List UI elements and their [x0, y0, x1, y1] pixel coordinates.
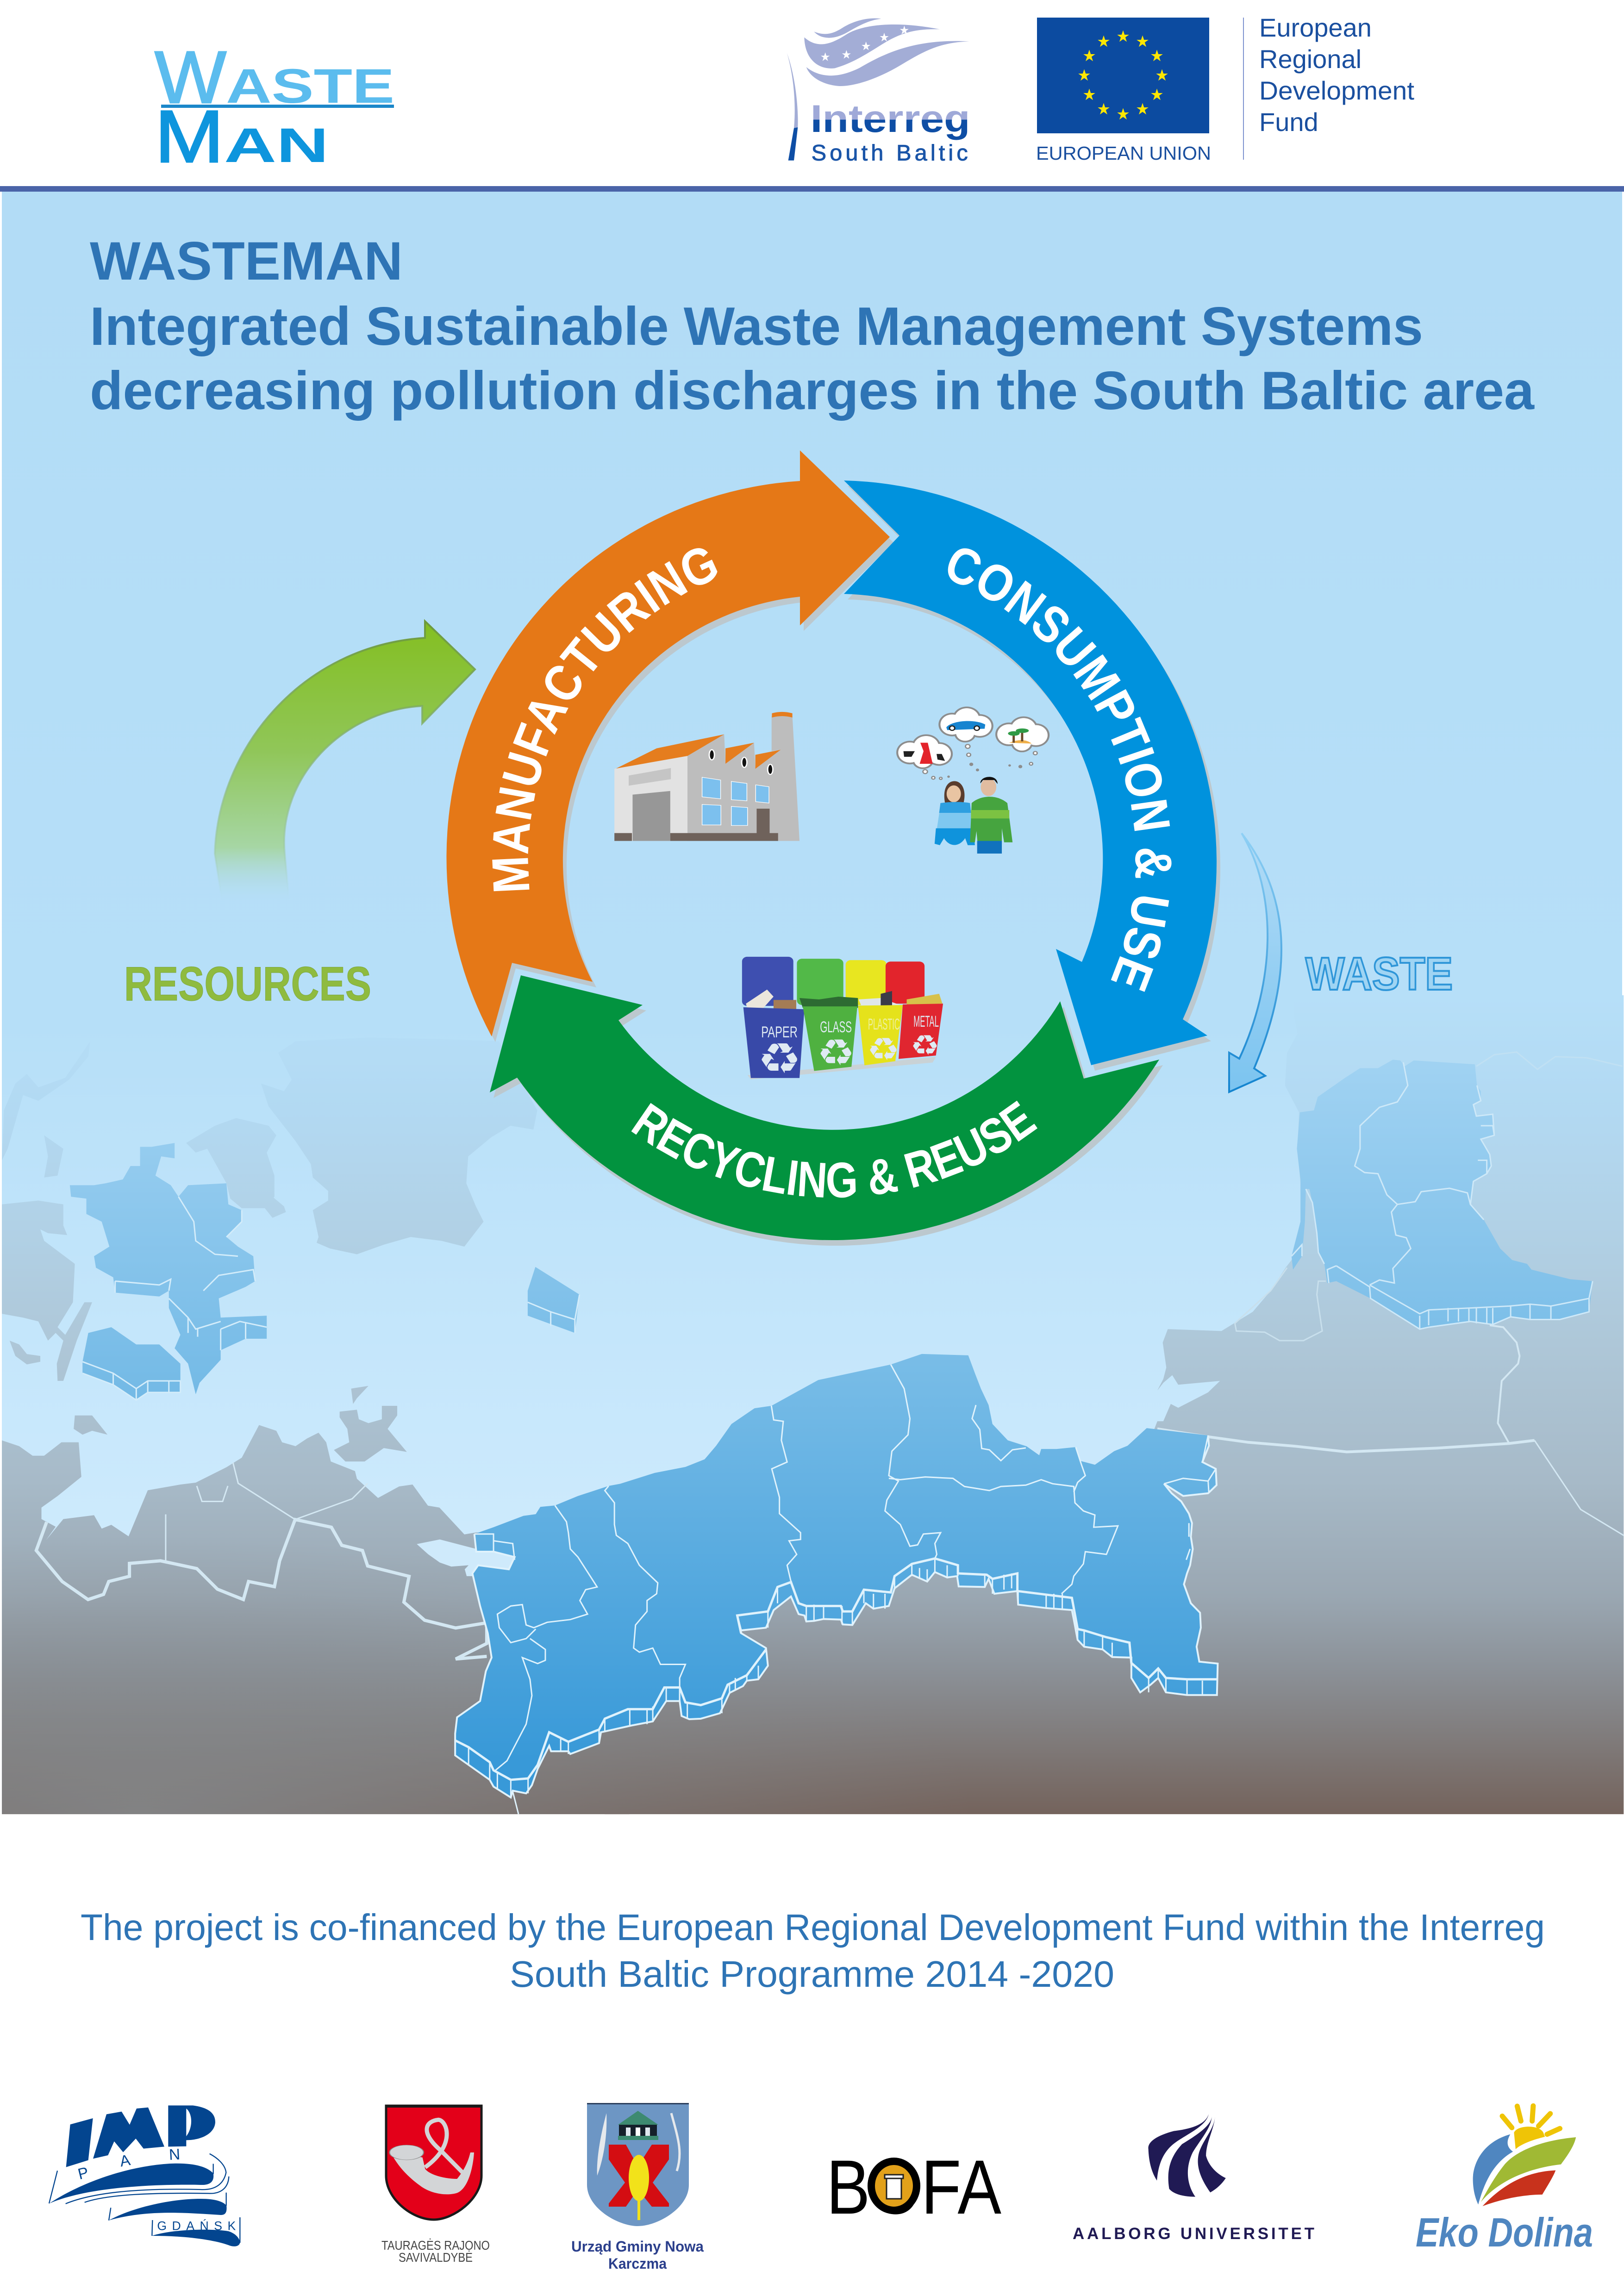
logo: Eko Dolina	[1416, 2106, 1593, 2255]
icon: recycling bins: PLASTIC	[868, 1015, 900, 1033]
icon: recycling bins: ♻	[910, 1029, 939, 1062]
arrow: resources	[215, 621, 475, 903]
logo: Aalborg Universitet	[1073, 2114, 1314, 2243]
text: Urzad Gminy Nowa Karczma: Urząd Gminy Nowa	[571, 2238, 704, 2255]
text: co-financing statement: The project is co-financed by the European Regional Development Fund within the Interreg	[81, 1907, 1545, 1948]
cycle: recycling and reuse arrow	[490, 975, 1163, 1246]
label: WASTE: WASTE	[1305, 948, 1453, 1000]
text: Urzad Gminy Nowa Karczma	[571, 2238, 704, 2272]
logo: EU flag: EUROPEAN UNION	[1036, 143, 1211, 164]
map: highlighted regions Poland	[455, 1354, 1218, 1797]
logo: WasteMan: ASTE	[226, 59, 394, 113]
logo: IMP PAN Gdansk: P	[76, 2164, 90, 2183]
logo: IMP PAN Gdansk: GDAŃSK	[157, 2219, 236, 2233]
map: line below Poland	[512, 1791, 518, 1814]
logo: Interreg South Baltic	[787, 19, 970, 166]
map: western land masses	[2, 1037, 630, 1814]
text: European Regional Development Fund	[1243, 13, 1414, 160]
logo: Interreg South Baltic: Interreg	[811, 97, 970, 140]
logo: EU flag	[1036, 18, 1211, 164]
logo: IMP PAN Gdansk	[49, 2105, 240, 2246]
title: decreasing pollution discharges in the South Baltic area	[90, 360, 1535, 421]
text: co-financing statement: South Baltic Programme 2014 -2020	[510, 1953, 1114, 1995]
logo: WasteMan: M	[155, 95, 224, 178]
icon: recycling bins	[742, 957, 943, 1083]
text: European Regional Development Fund: Fund	[1259, 107, 1318, 137]
logo: Taurage coat of arms	[385, 2105, 482, 2220]
text: Taurages rajono savivaldybe: TAURAGĖS RAJONO	[381, 2238, 490, 2252]
logo: BOFA: BOFA	[826, 2145, 1001, 2230]
map: eastern borders	[1157, 1052, 1624, 1535]
logo: Interreg South Baltic: South Baltic	[812, 141, 968, 166]
icon: recycling bins: ♻	[867, 1031, 899, 1068]
cycle: consumption and use arrow	[844, 480, 1220, 1071]
logo: Aalborg Universitet: AALBORG UNIVERSITET	[1073, 2225, 1314, 2243]
text: Taurages rajono savivaldybe	[381, 2238, 490, 2265]
map: white borders on land	[36, 1463, 487, 1659]
map: highlighted region Lithuania	[1292, 1060, 1593, 1329]
text: METAL	[913, 1012, 939, 1030]
text: co-financing statement	[81, 1907, 1545, 1995]
logo: IMP PAN Gdansk: N	[169, 2146, 181, 2164]
icon: recycling bins: ♻	[817, 1032, 855, 1074]
logo: Nowa Karczma coat of arms	[587, 2103, 689, 2226]
map: lagoon	[417, 1540, 515, 1598]
text: European Regional Development Fund: European	[1259, 13, 1372, 42]
icon: people dreaming of goods	[896, 706, 1049, 854]
logo: WasteMan: AN	[224, 119, 329, 173]
icon: recycling bins: ♻	[757, 1035, 801, 1083]
text: Taurages rajono savivaldybe: SAVIVALDYBĖ	[399, 2250, 473, 2265]
map: eastern land masses	[605, 995, 1624, 1814]
title: Integrated Sustainable Waste Management Systems	[90, 296, 1423, 356]
icon: recycling bins: PAPER	[761, 1023, 798, 1041]
text: Urzad Gminy Nowa Karczma: Karczma	[608, 2255, 667, 2272]
panel: map background	[2, 192, 1624, 1814]
logo: IMP PAN Gdansk: A	[119, 2152, 132, 2171]
cycle: manufacturing arrow	[446, 450, 893, 1042]
arrow: waste	[1229, 833, 1281, 1092]
map: island Bornholm	[528, 1267, 580, 1333]
logo: WasteMan: W	[155, 36, 226, 119]
text: European Regional Development Fund: Regional	[1259, 44, 1362, 74]
map: darker bottom-left tone	[2, 1528, 1020, 1814]
map: highlighted region Denmark	[70, 1143, 267, 1400]
cycle: recycling and reuse arrow: RECYCLING & REUSE	[623, 1090, 1045, 1208]
title: WASTEMAN	[90, 231, 403, 291]
icon: factory	[614, 712, 800, 841]
logo: WasteMan	[155, 36, 394, 178]
icon: recycling bins: GLASS	[820, 1018, 852, 1036]
label: RESOURCES: RESOURCES	[124, 957, 371, 1011]
header band line	[0, 186, 1624, 192]
cycle: consumption and use arrow: CONSUMPTION & USE	[937, 533, 1182, 998]
logo: Eko Dolina: Eko Dolina	[1416, 2209, 1593, 2255]
cycle: manufacturing arrow: MANUFACTURING	[481, 533, 727, 895]
text: European Regional Development Fund: Development	[1259, 76, 1414, 105]
title	[90, 231, 1535, 421]
